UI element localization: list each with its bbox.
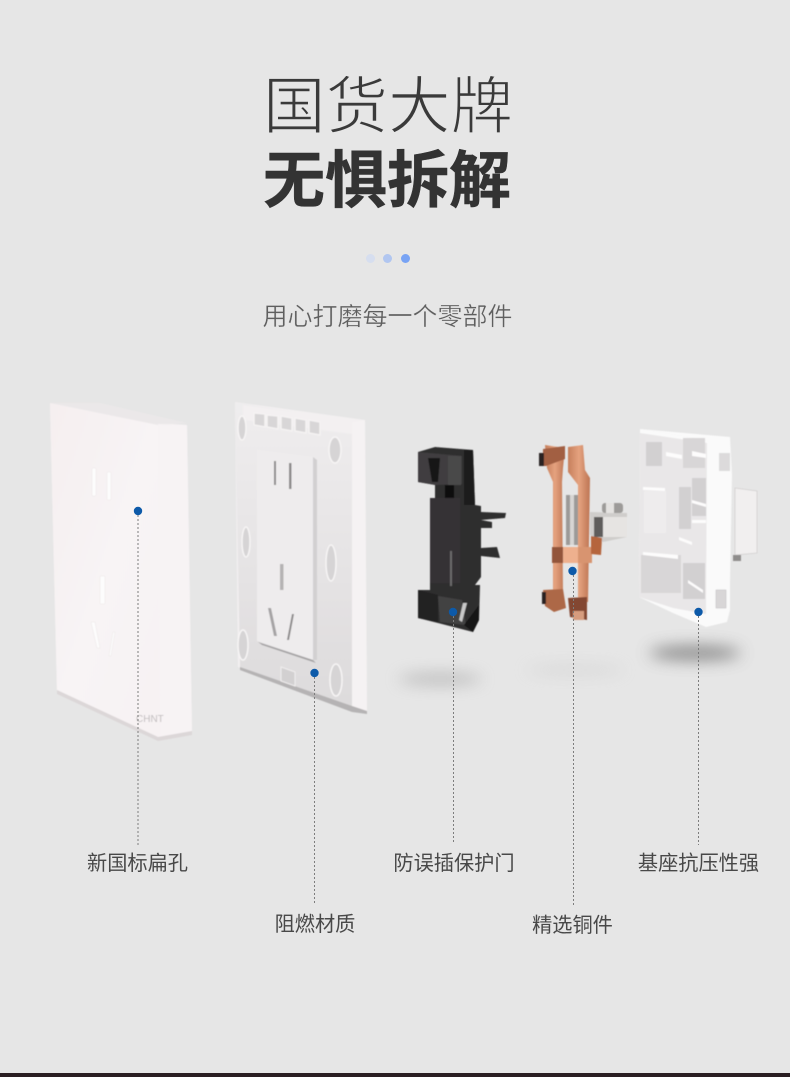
part: front cover plate: CHNT (136, 714, 164, 725)
callout: 基座抗压性强: 基座抗压性强 (638, 852, 759, 875)
title: light line: 国货大牌 (263, 72, 513, 142)
callout: 基座抗压性强 (638, 608, 759, 875)
callout: 新国标扁孔 (87, 507, 188, 875)
title: bold line: 无惧拆解 (263, 147, 511, 216)
ground shadows (398, 646, 741, 684)
callout: 精选铜件: 精选铜件 (532, 914, 613, 937)
callout: 防误插保护门 (393, 608, 515, 875)
part: black safety shutter (418, 447, 506, 632)
callout: 阻燃材质: 阻燃材质 (275, 913, 355, 936)
callout: 新国标扁孔: 新国标扁孔 (87, 852, 188, 875)
callout: 精选铜件 (532, 567, 613, 937)
part: inner frame plate (235, 402, 367, 714)
callout: 阻燃材质 (275, 669, 355, 936)
callout: 防误插保护门: 防误插保护门 (393, 852, 515, 875)
part: front cover plate (50, 403, 192, 741)
subtitle: 用心打磨每一个零部件 (262, 303, 513, 331)
part: white base (639, 429, 757, 627)
silver mechanism (566, 495, 627, 545)
part: copper contacts (539, 445, 627, 620)
decorative dots (366, 254, 410, 263)
bottom dark edge (0, 1073, 790, 1077)
